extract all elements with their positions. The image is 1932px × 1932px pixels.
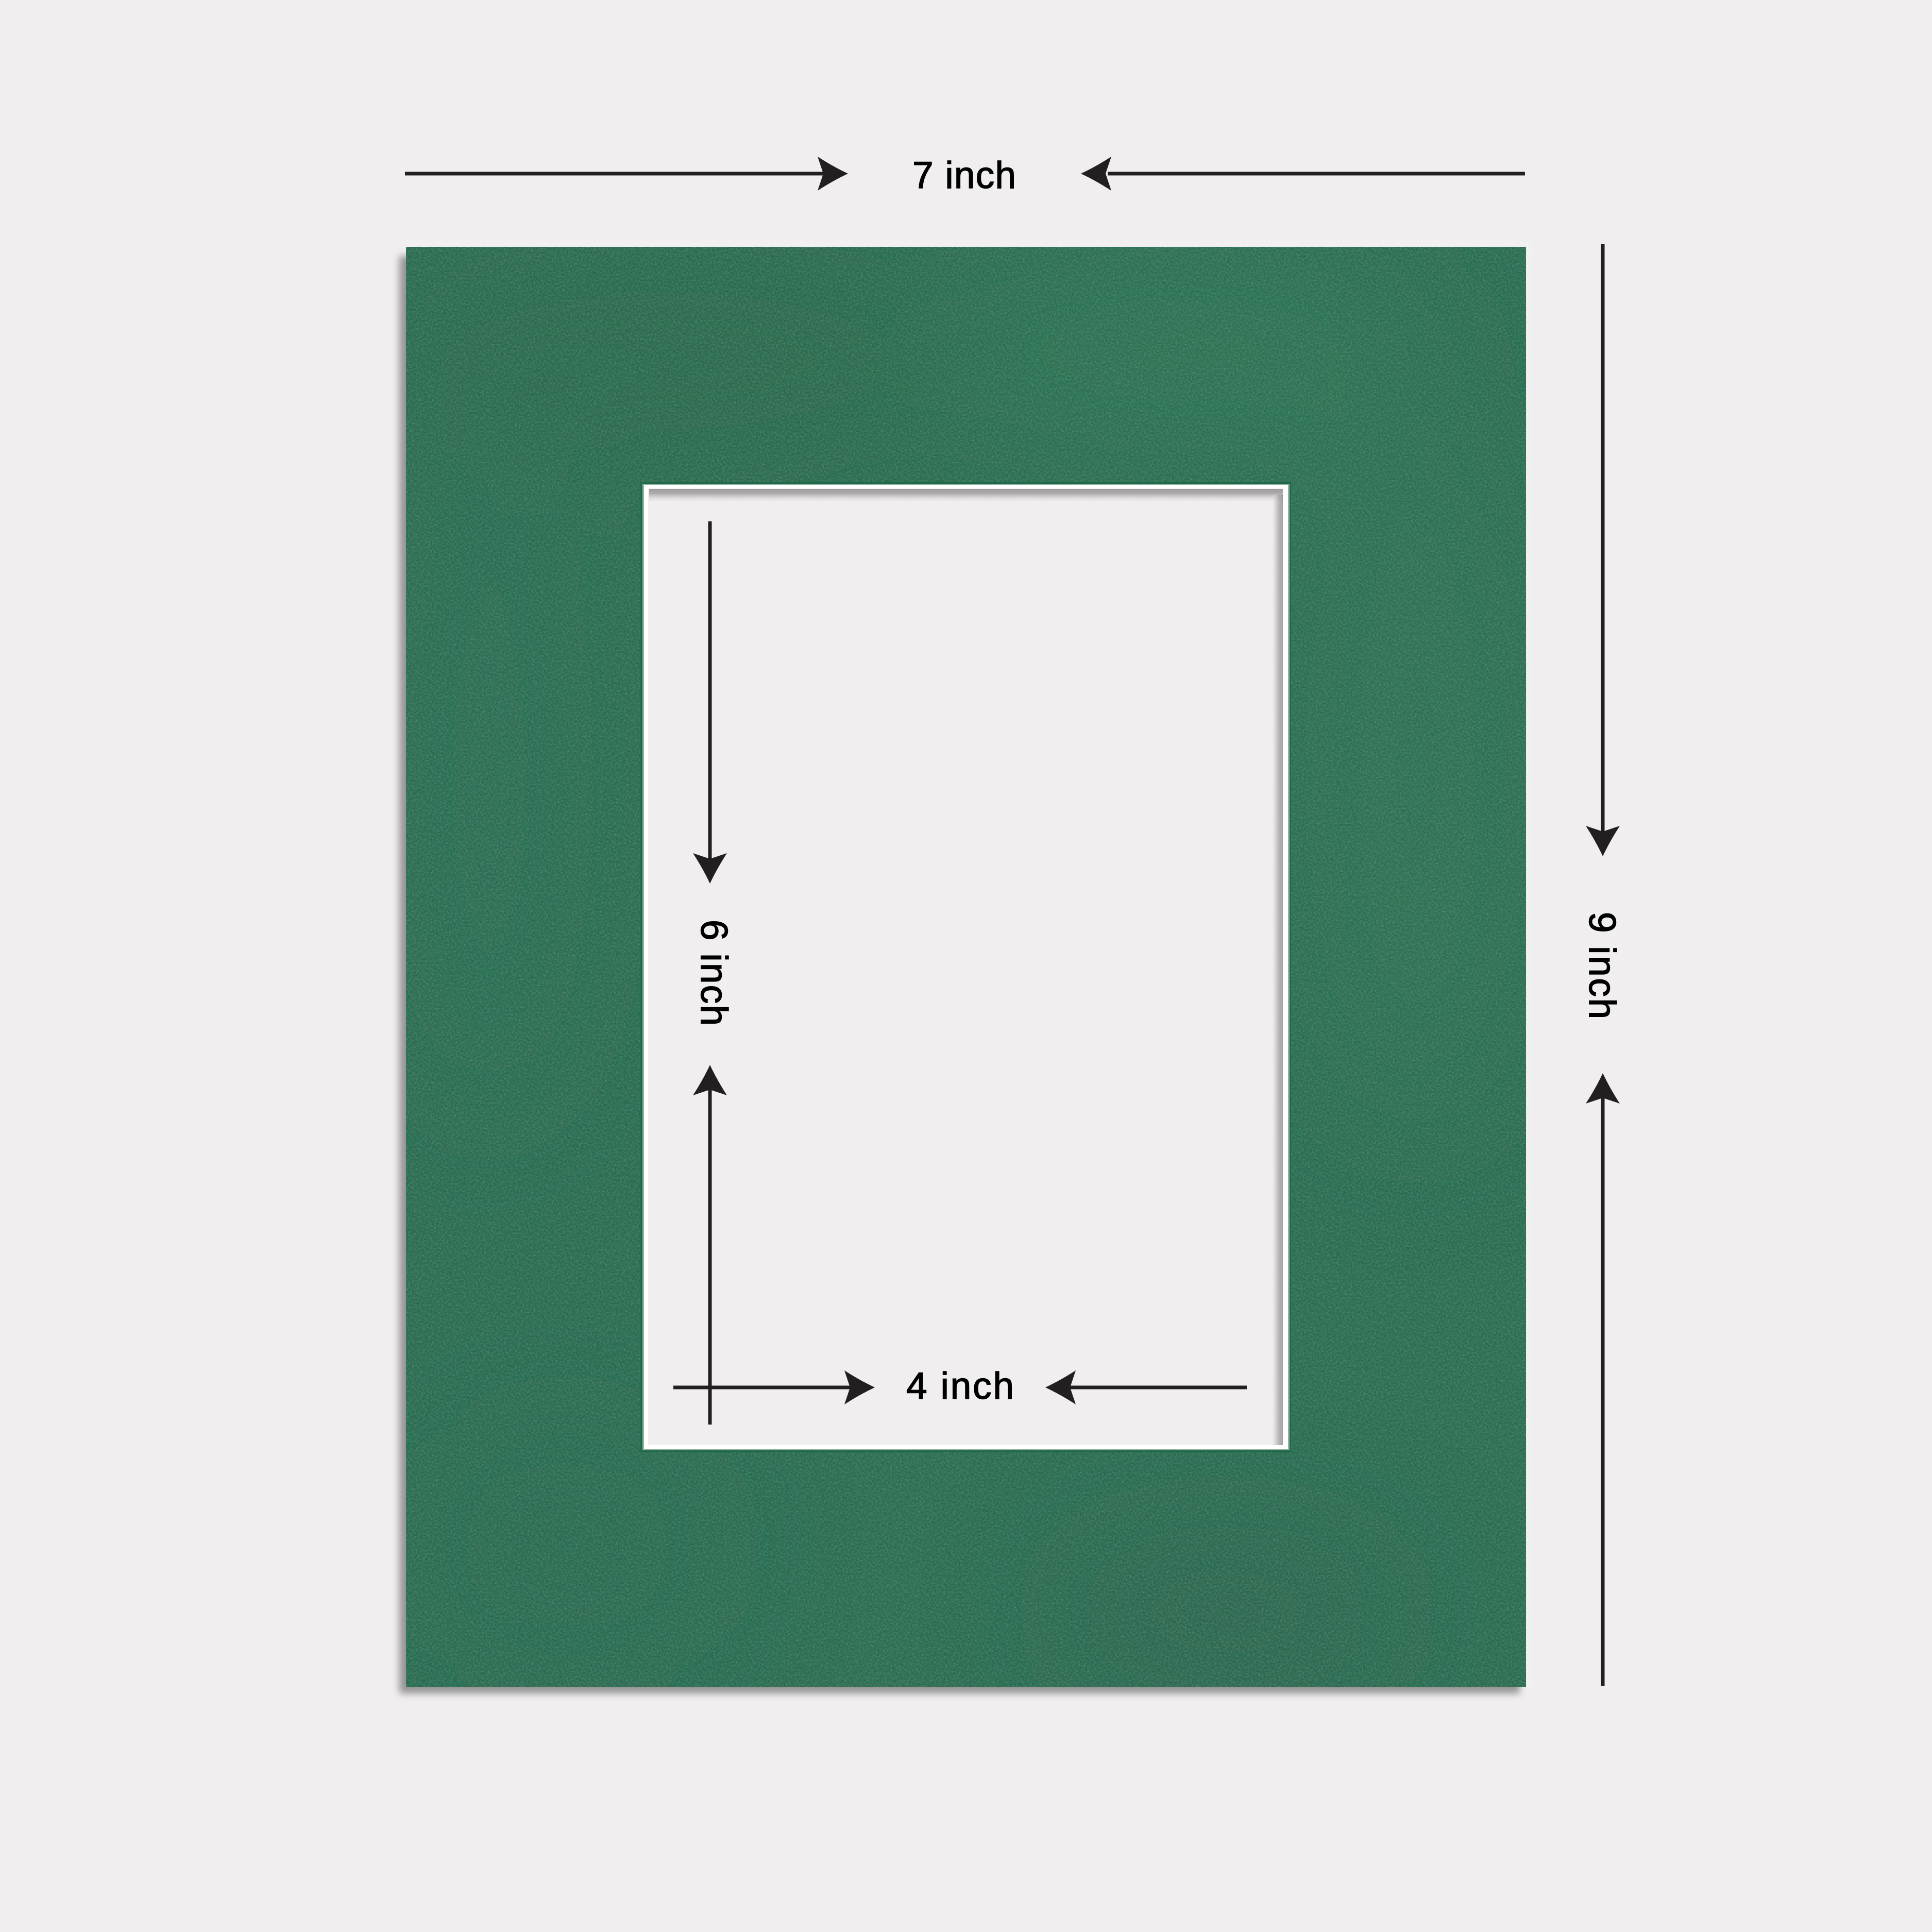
window cut dark edge	[640, 482, 1291, 1452]
inner right shadow	[1272, 495, 1283, 1445]
arrow: right to left	[1045, 1370, 1247, 1404]
window opening	[640, 482, 1291, 1452]
dimension: width 7 inch	[405, 155, 1525, 196]
arrow: left to right	[673, 1370, 875, 1404]
board drop shadow	[399, 241, 1531, 1693]
label: 9 inch: 9 inch	[1581, 912, 1623, 1019]
paper grain	[406, 247, 1526, 1687]
window bevel light edge	[642, 484, 1290, 1450]
panel: green mat board	[361, 222, 1551, 1687]
tonal variation	[361, 222, 1551, 1680]
white bevel	[644, 485, 1288, 1449]
inner top shadow	[649, 489, 1283, 503]
arrow: left to right	[405, 157, 848, 191]
arrow: right to left	[1081, 157, 1525, 191]
arrow: top to bottom	[693, 521, 727, 884]
dimension: window width 4 inch	[673, 1365, 1247, 1407]
label: 4 inch: 4 inch	[906, 1365, 1014, 1407]
infographic canvas	[395, 157, 1620, 1698]
dimension: height 9 inch	[1581, 244, 1623, 1686]
label: 6 inch: 6 inch	[693, 920, 735, 1026]
dimension: window height 6 inch	[693, 521, 735, 1425]
arrow: bottom to top	[1586, 1073, 1620, 1686]
label: 7 inch: 7 inch	[912, 155, 1016, 196]
arrow: bottom to top	[693, 1065, 727, 1425]
window interior	[648, 488, 1283, 1445]
arrow: top to bottom	[1586, 244, 1620, 856]
